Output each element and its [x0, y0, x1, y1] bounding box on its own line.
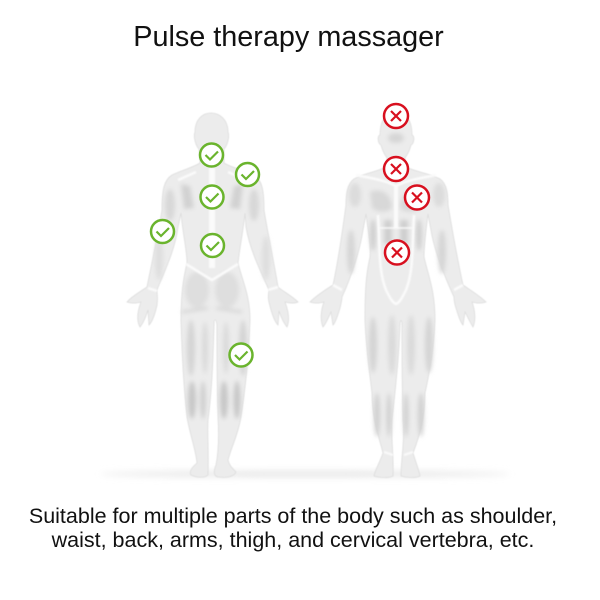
cross badge: head	[384, 104, 408, 128]
check badge: waist	[201, 234, 224, 257]
check badge: arm	[151, 220, 174, 243]
front muscle shading	[347, 133, 446, 437]
cross badge: heart	[405, 186, 429, 210]
caption	[29, 504, 557, 552]
cross badge: throat	[384, 157, 408, 181]
check badge: shoulder	[236, 163, 259, 186]
check badge: neck	[200, 144, 223, 166]
floor shadow	[100, 471, 510, 477]
back muscle shading	[155, 184, 270, 419]
caption: Suitable for multiple parts of the body such as shoulder,	[29, 504, 557, 528]
check badge: upper back	[200, 186, 224, 208]
cross badge: abdomen	[385, 240, 409, 264]
title: Pulse therapy massager	[133, 21, 444, 53]
figure: back view	[127, 113, 298, 477]
front highlights	[333, 175, 463, 455]
caption: waist, back, arms, thigh, and cervical vertebra, etc.	[52, 528, 534, 552]
check badge: thigh	[230, 344, 252, 366]
back highlights	[148, 168, 278, 291]
figure: front view	[310, 112, 486, 478]
